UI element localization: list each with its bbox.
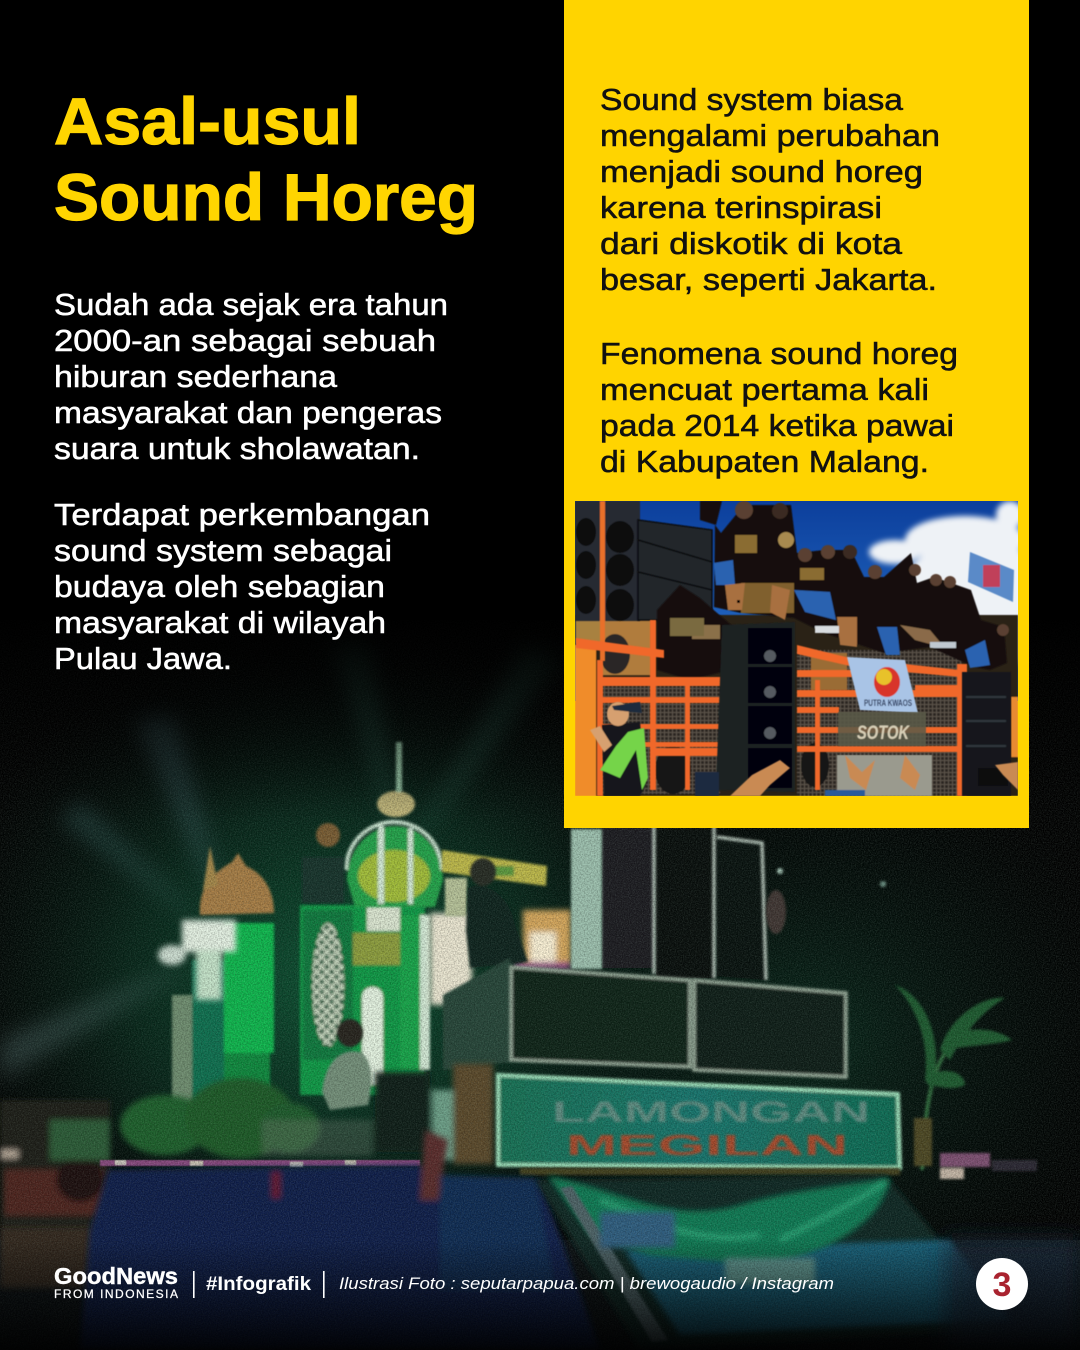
lower speakers <box>511 967 846 1077</box>
person standing <box>443 858 528 1070</box>
raised hands and phones <box>695 755 1018 796</box>
logo: GoodNews from Indonesia: FROM INDONESIA <box>54 1287 178 1301</box>
truck body <box>575 612 1018 796</box>
hashtag: #Infografik <box>206 1274 311 1295</box>
sign: Sotok <box>838 712 926 746</box>
banner: Putra Kwaos <box>847 657 918 713</box>
text block: development <box>54 497 430 676</box>
text block: inspiration: dari diskotik di kota <box>600 226 903 261</box>
photo: sound horeg truck with crowd <box>575 501 1045 796</box>
text block: phenomenon <box>600 336 958 479</box>
yellow sign <box>442 850 547 916</box>
green haze <box>0 630 1080 1350</box>
right speaker stack <box>962 672 1011 796</box>
flag <box>968 552 1014 602</box>
sitting person <box>322 1019 371 1110</box>
orange railings <box>576 620 967 796</box>
sky and clouds <box>575 501 1045 701</box>
text block: development: Pulau Jawa. <box>54 641 232 676</box>
fade at top of photo <box>0 0 1080 820</box>
text block: development: budaya oleh sebagian <box>54 569 385 604</box>
central tower <box>300 905 430 1095</box>
text block: inspiration <box>600 82 940 297</box>
text block: origins: hiburan sederhana <box>54 359 338 394</box>
page number badge <box>976 1258 1028 1310</box>
divider <box>323 1271 325 1298</box>
text block: origins: masyarakat dan pengeras <box>54 395 442 430</box>
logo: GoodNews from Indonesia <box>54 1263 178 1301</box>
title: Sound Horeg <box>54 160 478 234</box>
banner: Putra Kwaos: PUTRA KWAOS <box>864 698 912 708</box>
film grain dark <box>0 620 1080 1350</box>
text block: phenomenon: mencuat pertama kali <box>600 372 929 407</box>
green banner with lettering <box>498 1075 900 1175</box>
banana plant <box>895 985 1012 1170</box>
text block: phenomenon: Fenomena sound horeg <box>600 336 958 371</box>
text block: phenomenon: di Kabupaten Malang. <box>600 444 929 479</box>
green banner with lettering: MEGILAN <box>566 1130 848 1162</box>
text block: origins: Sudah ada sejak era tahun <box>54 287 448 322</box>
text block: inspiration: mengalami perubahan <box>600 118 940 153</box>
crowd <box>657 501 1009 680</box>
line array speakers <box>638 520 712 620</box>
hot light on left tower <box>158 920 236 1000</box>
warm lights <box>515 910 571 969</box>
text block: inspiration: karena terinspirasi <box>600 190 882 225</box>
distant lights right <box>777 868 1037 1179</box>
page number badge: 3 <box>993 1266 1011 1304</box>
title: Asal-usul <box>54 84 361 158</box>
text block: inspiration: besar, seperti Jakarta. <box>600 262 937 297</box>
man in green vest <box>590 702 648 796</box>
sign: Sotok: SOTOK <box>857 723 910 744</box>
green banner with lettering: LAMONGAN <box>552 1096 870 1129</box>
left horn speakers <box>575 501 640 661</box>
green glowing dome and finial <box>346 742 443 907</box>
footer bar <box>54 1258 1028 1310</box>
light strip <box>100 1160 420 1167</box>
blue skirt <box>80 1130 600 1350</box>
left car and road <box>0 1100 110 1288</box>
text block: origins: suara untuk sholawatan. <box>54 431 420 466</box>
title <box>54 84 478 234</box>
divider <box>193 1271 195 1298</box>
gold dome <box>200 846 274 915</box>
text block: origins <box>54 287 448 466</box>
text block: phenomenon: pada 2014 ketika pawai <box>600 408 954 443</box>
dark figure behind dome <box>302 823 344 903</box>
photo credit: Ilustrasi Foto : seputarpapua.com | brewogaudio / Instagram <box>339 1274 834 1293</box>
center speaker stack <box>716 622 795 792</box>
text block: inspiration: menjadi sound horeg <box>600 154 923 189</box>
left tower <box>172 923 274 1113</box>
logo: GoodNews from Indonesia: GoodNews <box>54 1263 178 1289</box>
text block: development: sound system sebagai <box>54 533 392 568</box>
fade at bottom of photo <box>0 1240 1080 1350</box>
green drape and lower banner <box>535 1175 1080 1350</box>
film grain light <box>0 620 1080 1350</box>
plants <box>120 1064 493 1164</box>
text block: development: Terdapat perkembangan <box>54 497 430 532</box>
text block: origins: 2000-an sebagai sebuah <box>54 323 436 358</box>
upper speakers <box>571 825 786 980</box>
light rays <box>0 640 560 1080</box>
text block: inspiration: Sound system biasa <box>600 82 904 117</box>
bright warm area <box>430 913 472 1005</box>
panel: yellow column <box>564 0 1045 828</box>
text block: development: masyarakat di wilayah <box>54 605 386 640</box>
